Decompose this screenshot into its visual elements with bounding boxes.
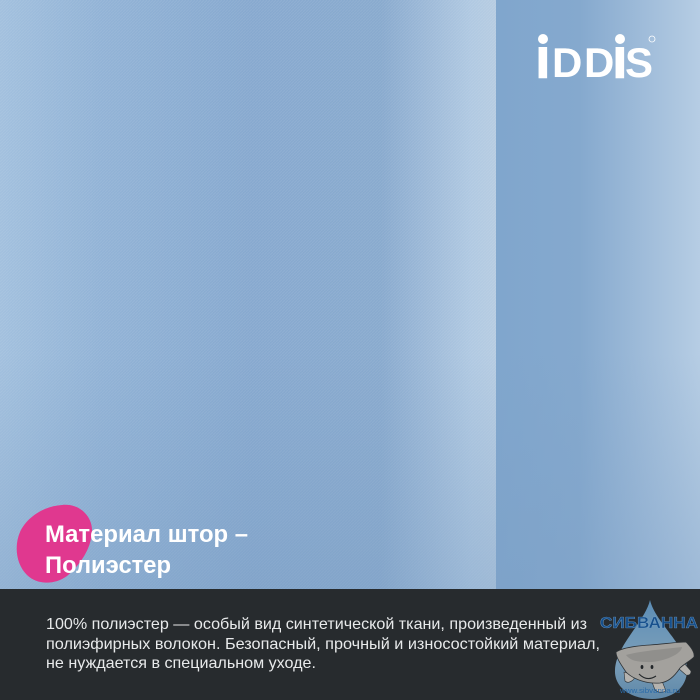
text block: material description: полиэфирных волокон. Безопасный, прочный и износостойкий материал, <box>46 636 600 653</box>
logo: IDDIS: S <box>625 39 653 86</box>
logo: IDDIS: D <box>584 39 614 86</box>
logo: IDDIS: I <box>537 39 549 86</box>
logo: IDDIS: D <box>552 39 582 86</box>
watermark name: СИБВАННА <box>600 615 698 632</box>
accent: pink blob <box>17 505 92 583</box>
heading: Полиэстер <box>45 552 171 579</box>
icon: water drop <box>615 600 687 699</box>
text block: material description: не нуждается в специальном уходе. <box>46 655 316 672</box>
logo: IDDIS: I <box>614 39 626 86</box>
panel: dark caption bar <box>0 589 700 700</box>
text block: material description <box>46 616 600 672</box>
watermark: Sibvanna logo <box>600 600 698 699</box>
heading <box>45 521 248 579</box>
text block: material description: 100% полиэстер — особый вид синтетической ткани, произведенный из <box>46 616 587 633</box>
watermark url: www.sibvanna.ru <box>619 688 680 695</box>
icon: bathtub <box>616 642 694 692</box>
heading: Материал штор – <box>45 521 248 548</box>
logo: IDDIS <box>537 34 655 86</box>
